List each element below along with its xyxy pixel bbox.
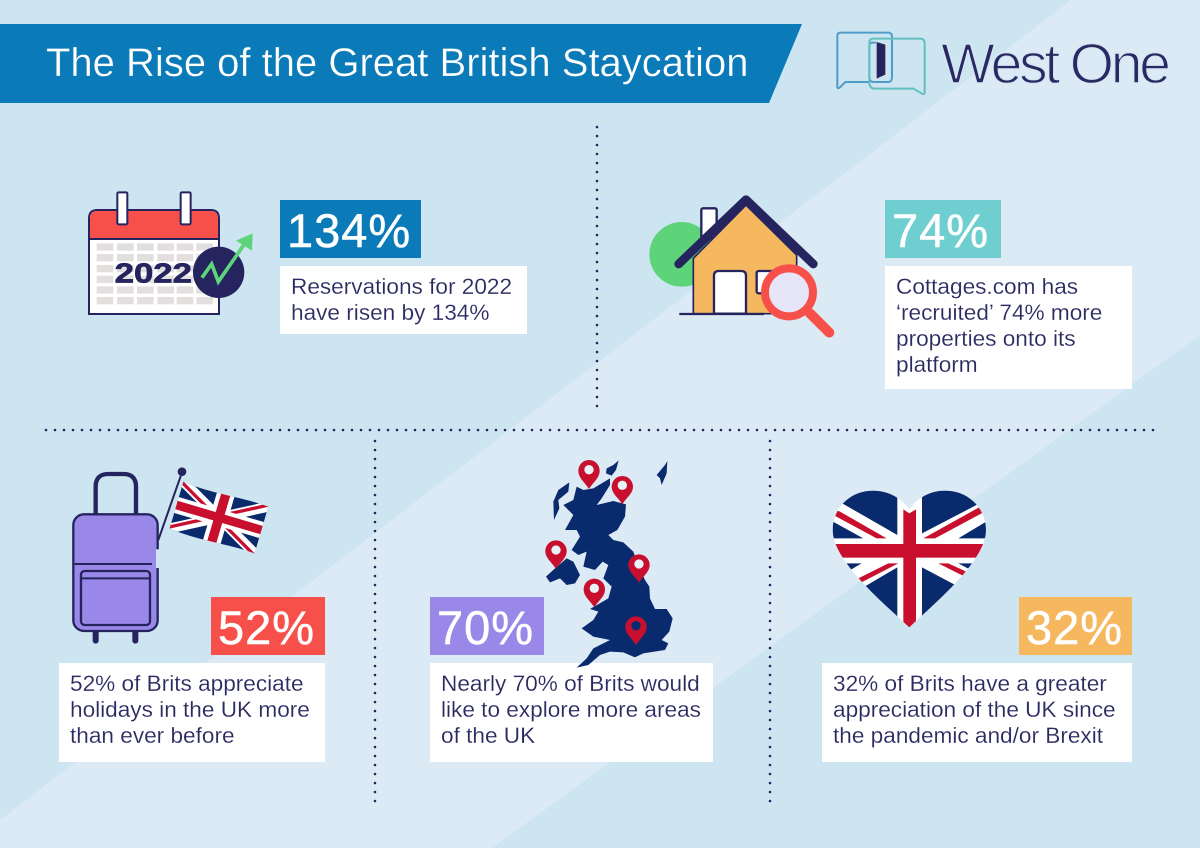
panel: greater appreciation — [822, 487, 1132, 762]
stat: 32%: 32% — [1026, 601, 1123, 654]
logo: West One — [837, 32, 1169, 96]
text: cottages: platform — [896, 352, 978, 377]
text: explore the UK: like to explore more areas — [441, 697, 701, 722]
icon: union flag — [170, 482, 268, 554]
stat: 134%: 134% — [287, 204, 411, 257]
icon: logo speech bubbles — [837, 33, 925, 94]
text: appreciate holidays: than ever before — [70, 723, 235, 748]
panel: cottages — [649, 200, 1132, 389]
text: explore the UK: of the UK — [441, 723, 535, 748]
text: reservations: have risen by 134% — [291, 300, 489, 325]
stat: 52%: 52% — [218, 601, 315, 654]
text: explore the UK — [430, 663, 713, 762]
panel: appreciate holidays — [59, 467, 325, 762]
dotted dividers — [46, 127, 1154, 803]
text: explore the UK: Nearly 70% of Brits would — [441, 671, 700, 696]
text: appreciate holidays: holidays in the UK more — [70, 697, 310, 722]
text: reservations — [280, 266, 527, 334]
text: cottages: properties onto its — [896, 326, 1076, 351]
logo: West One: West One — [941, 32, 1169, 96]
text: greater appreciation — [822, 663, 1132, 762]
icon: suitcase with flag — [73, 467, 274, 641]
text: appreciate holidays: 52% of Brits appreciate — [70, 671, 304, 696]
stat: 74%: 74% — [892, 204, 989, 257]
stat: 70%: 70% — [437, 601, 534, 654]
text: greater appreciation: appreciation of the UK since — [833, 697, 1116, 722]
title banner: The Rise of the Great British Staycation — [46, 41, 749, 85]
icon: calendar 2022 — [89, 192, 253, 314]
icon: house with magnifier — [649, 200, 829, 333]
text: cottages: ‘recruited’ 74% more — [896, 300, 1102, 325]
text: appreciate holidays — [59, 663, 325, 762]
text: cottages — [885, 266, 1132, 389]
text: cottages: Cottages.com has — [896, 274, 1078, 299]
text: reservations: Reservations for 2022 — [291, 274, 512, 299]
icon: calendar 2022: 2022 — [115, 257, 192, 288]
icon: UK map with pins — [545, 460, 673, 668]
panel: explore the UK — [430, 460, 713, 762]
text: greater appreciation: 32% of Brits have a greater — [833, 671, 1107, 696]
panel: reservations — [89, 192, 527, 334]
title banner — [0, 24, 802, 103]
text: greater appreciation: the pandemic and/or Brexit — [833, 723, 1104, 748]
icon: union flag heart — [830, 487, 990, 630]
